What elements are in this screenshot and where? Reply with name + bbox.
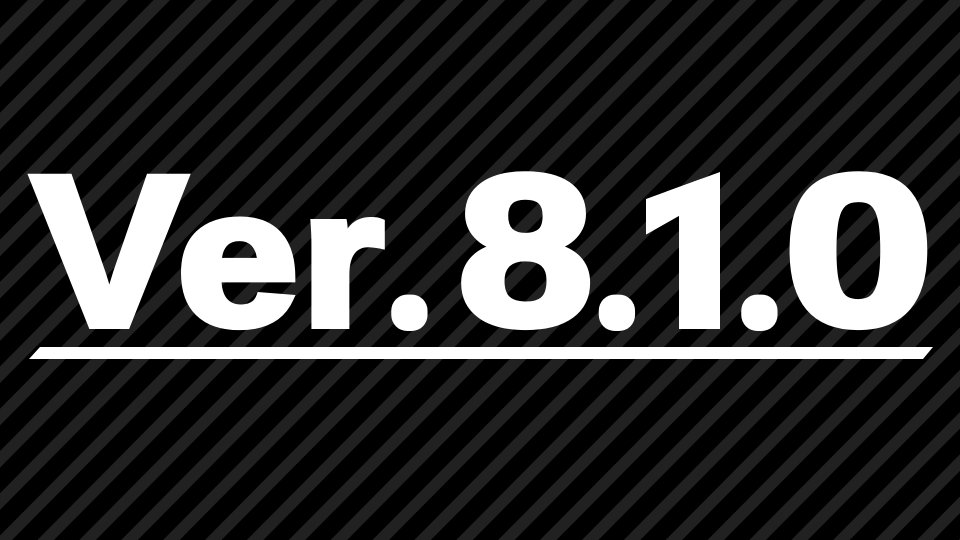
underline bar bbox=[29, 347, 933, 359]
title: Ver. 8.1.0 bbox=[27, 171, 928, 331]
title: Ver. 8.1.0: 8 bbox=[458, 132, 593, 370]
title: Ver. 8.1.0: . bbox=[755, 289, 764, 322]
title: Ver. 8.1.0: . bbox=[405, 289, 414, 322]
title: Ver. 8.1.0: 0 bbox=[784, 132, 933, 370]
title: Ver. 8.1.0: r bbox=[301, 150, 384, 366]
title: Ver. 8.1.0: V bbox=[32, 132, 186, 371]
title: Ver. 8.1.0: 1 bbox=[632, 133, 762, 371]
title: Ver. 8.1.0: . bbox=[613, 289, 621, 322]
title: Ver. 8.1.0: e bbox=[177, 150, 298, 366]
